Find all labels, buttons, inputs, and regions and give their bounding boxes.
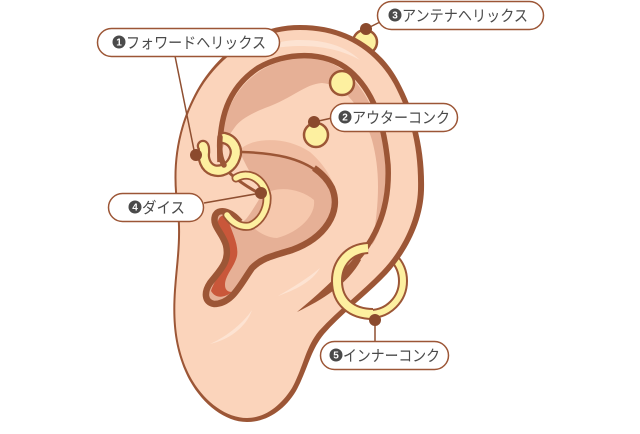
label: daith [108, 194, 204, 222]
label: forward helix: 1 [116, 38, 122, 48]
outer conch stud [304, 123, 328, 147]
highlights [210, 310, 252, 344]
label: antenna helix [378, 2, 544, 30]
outer studs [304, 71, 354, 147]
label: outer conch: 2 [342, 112, 348, 124]
label: daith: ダイス [142, 199, 185, 217]
label: outer conch: アウターコンク [352, 109, 450, 127]
label: inner conch: 5 [333, 350, 339, 362]
scapha shade [222, 58, 387, 245]
ear [173, 25, 424, 422]
leader lines [175, 22, 380, 342]
helix lower line [220, 158, 262, 195]
label: forward helix [98, 28, 280, 56]
antihelix thin stroke [242, 152, 318, 172]
helix highlight [250, 40, 360, 60]
forward helix ring [203, 137, 236, 171]
label: antenna helix: アンテナヘリックス [402, 7, 528, 25]
label: daith: 4 [132, 202, 138, 214]
piercing dots [190, 23, 381, 326]
canal red [211, 216, 237, 297]
concha highlight [254, 189, 314, 238]
ear outline [173, 25, 424, 422]
ear skin [175, 30, 418, 418]
label: outer conch [330, 104, 458, 132]
upper concha band [240, 140, 336, 192]
outer conch back stud [330, 71, 354, 95]
label: antenna helix: 3 [392, 10, 398, 22]
label: inner conch [320, 342, 448, 370]
inner conch ring front [337, 248, 373, 314]
antenna helix stud [353, 30, 377, 54]
helix inner stroke [220, 56, 388, 258]
label: forward helix: フォワードヘリックス [126, 34, 266, 52]
daith ring [227, 175, 267, 226]
label: inner conch: インナーコンク [343, 347, 440, 365]
helix stroke taper [297, 256, 361, 312]
concha shade [206, 152, 335, 304]
antihelix thick stroke [206, 168, 335, 304]
inner conch ring back [337, 248, 403, 314]
